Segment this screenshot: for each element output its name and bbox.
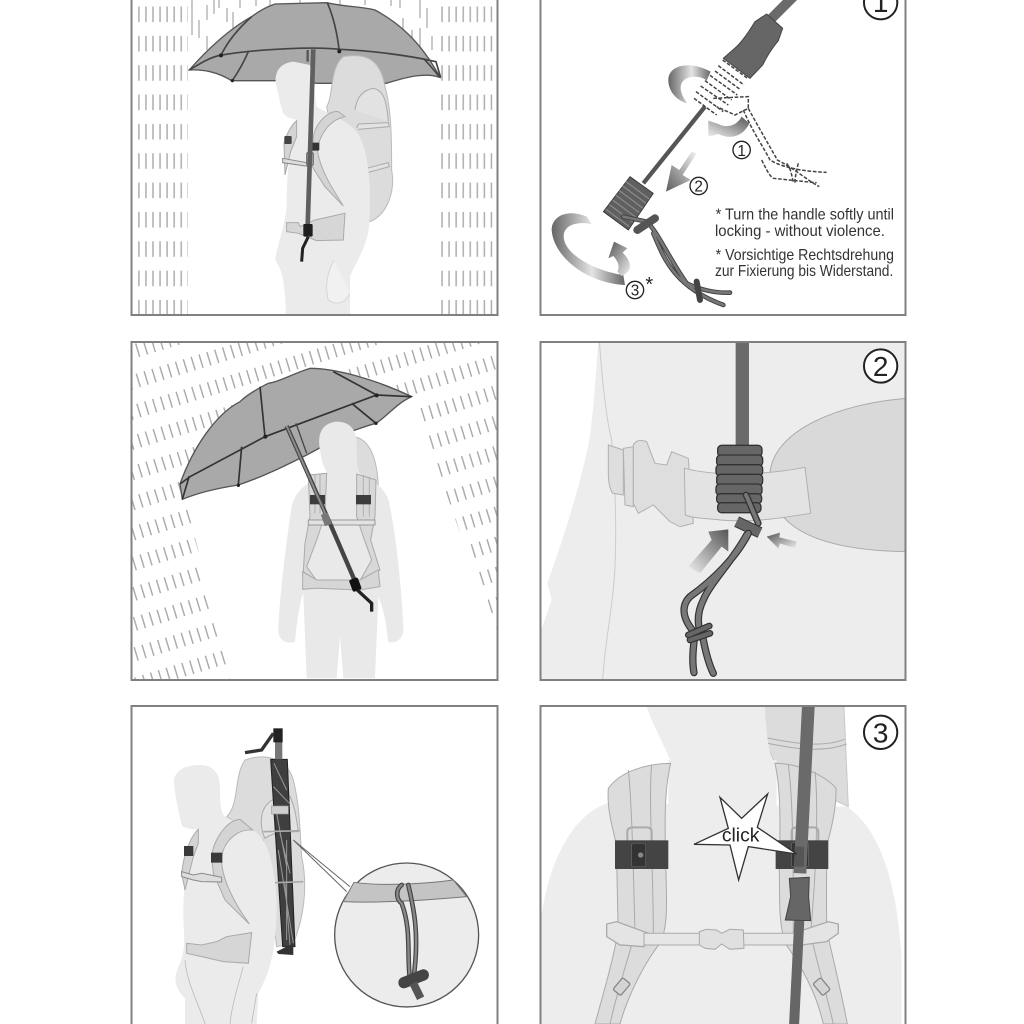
belt buckle [608, 441, 693, 527]
step number 3: 3 [873, 717, 888, 748]
big rotation arrow [552, 213, 625, 285]
shoulder straps [212, 819, 253, 924]
body edge shade [599, 340, 616, 680]
strap loops [627, 827, 818, 842]
label circled 3 [626, 281, 644, 300]
step number 2: 2 [873, 351, 888, 382]
dark strap bands [184, 846, 222, 863]
twist arrow 1 [708, 117, 749, 137]
frame panel 6 [540, 706, 906, 1024]
asterisk: * [645, 274, 653, 296]
instruction text: locking - without violence. [715, 223, 885, 240]
body silhouette [275, 62, 370, 315]
cord loop and knot [684, 533, 748, 673]
pack top pocket [261, 796, 298, 838]
shaft and handle tilted [287, 426, 372, 612]
dashed cord coil [694, 60, 827, 187]
label circled 1: 1 [737, 143, 746, 160]
step number 3 [864, 716, 897, 749]
label circled 3: 3 [631, 283, 639, 300]
squeeze arrow left [688, 529, 728, 573]
handle collar [785, 877, 811, 921]
loop and toggle in magnifier [397, 885, 423, 998]
zoom leader lines [293, 840, 350, 892]
umbrella shaft and handle [308, 49, 313, 227]
slanted rain [131, 342, 497, 680]
right dark clip band [776, 840, 828, 869]
sternum strap and buckle [607, 922, 838, 949]
umbrella canopy tilted [180, 368, 412, 499]
torso silhouette [540, 707, 902, 1024]
frame panel 4 [540, 342, 906, 680]
thin shaft [643, 107, 705, 183]
rain above umbrella [192, 0, 432, 50]
instruction text: * Turn the handle softly until [716, 206, 894, 223]
body [540, 340, 907, 680]
rotation arrow head [608, 242, 630, 276]
leg outlines [185, 960, 257, 1024]
panel: step 2 hip belt fixing [540, 340, 907, 680]
backpack side [227, 757, 305, 947]
strap in magnifier [343, 880, 467, 902]
magnifier circle [335, 863, 479, 1007]
chest strap [182, 872, 222, 882]
backpack [327, 56, 393, 222]
step number 1 [864, 0, 897, 19]
squeeze arrow right [767, 533, 797, 548]
straps [310, 111, 345, 206]
stopper [737, 495, 760, 533]
folded umbrella [245, 728, 303, 955]
belt strap [684, 467, 811, 521]
click burst [694, 794, 797, 880]
panel: tilted umbrella in slanted rain [131, 342, 497, 680]
shaft [793, 700, 809, 1024]
label circled 2: 2 [694, 179, 703, 196]
neck fill [668, 760, 777, 810]
hip belt [287, 213, 345, 241]
label circled 1 [733, 141, 750, 160]
hiker front view [278, 422, 404, 678]
hiker with backpack [275, 49, 393, 315]
hip belt [187, 933, 252, 963]
click burst: click [722, 825, 760, 846]
umbrella canopy [189, 3, 441, 83]
cord with stopper and knot [623, 217, 730, 305]
hiker silhouette [174, 765, 277, 1024]
panel: umbrella upright in vertical rain [137, 0, 493, 315]
cord coil [716, 445, 763, 513]
shaft [736, 343, 749, 445]
pack compression strap [764, 737, 847, 749]
instruction text: zur Fixierung bis Widerstand. [715, 263, 893, 280]
left shoulder strap [595, 763, 671, 1024]
panel: step 1 locking handle [552, 0, 897, 305]
right shoulder strap [775, 763, 847, 1024]
strap adjusters lower [613, 978, 830, 996]
handle grip [723, 0, 797, 78]
rotation arrow top [668, 65, 711, 103]
hip pad [770, 398, 907, 552]
panel: step 3 click into shoulder strap [540, 700, 902, 1024]
down arrow [666, 152, 697, 192]
frame panel 3 [132, 342, 498, 680]
cord coil on shaft [603, 177, 653, 230]
instruction text [715, 206, 894, 280]
frame panel 2 [540, 0, 906, 315]
panel: umbrella stowed on backpack [174, 728, 479, 1024]
left dark clip band [615, 840, 668, 869]
rain: left block [137, 0, 188, 315]
frame panel 1 [132, 0, 498, 315]
instruction text: * Vorsichtige Rechtsdrehung [716, 247, 894, 264]
step number 2 [864, 349, 897, 383]
frame panel 5 [132, 706, 498, 1024]
rain: right block [441, 0, 493, 315]
label circled 2 [690, 177, 707, 196]
pack top [764, 707, 848, 807]
